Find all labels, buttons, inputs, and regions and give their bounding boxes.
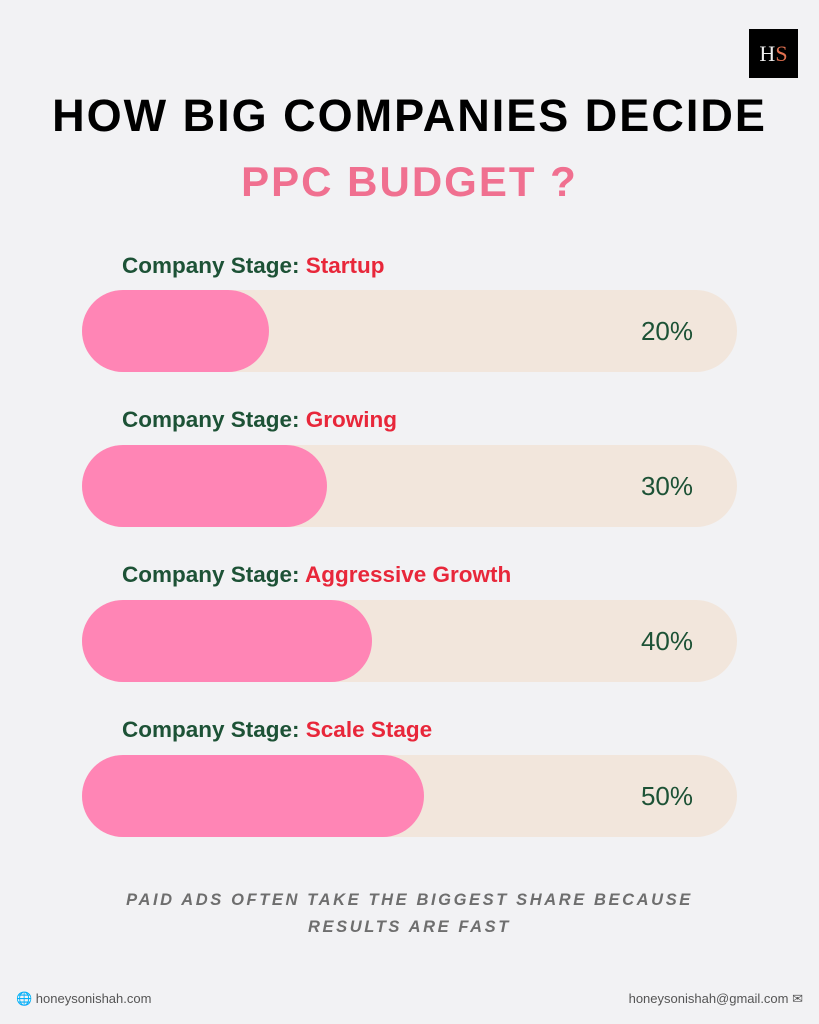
logo (749, 29, 798, 78)
bar: aggressive growth: 40% (641, 626, 693, 656)
footnote: RESULTS ARE FAST (308, 918, 511, 936)
bar: growing: 30% (641, 471, 693, 501)
footnote: PAID ADS OFTEN TAKE THE BIGGEST SHARE BECAUSE (126, 891, 693, 909)
subtitle: PPC BUDGET ? (241, 158, 578, 205)
footer: website: 🌐 honeysonishah.com (16, 991, 151, 1006)
label: startup: Company Stage: Startup (122, 253, 385, 278)
bar: startup (82, 290, 737, 372)
label: growing: Company Stage: Growing (122, 407, 397, 432)
bar: aggressive growth (82, 600, 737, 682)
bar: startup: 20% (641, 316, 693, 346)
label: scale stage: Company Stage: Scale Stage (122, 717, 432, 742)
bar: growing (82, 445, 737, 527)
footer: email: honeysonishah@gmail.com ✉ (629, 991, 803, 1006)
label: aggressive growth: Company Stage: Aggressive Growth (122, 562, 511, 587)
title: HOW BIG COMPANIES DECIDE (52, 90, 767, 141)
bar: scale stage: 50% (641, 781, 693, 811)
bar: scale stage (82, 755, 737, 837)
footnote (126, 891, 693, 936)
logo: HS (759, 41, 788, 66)
